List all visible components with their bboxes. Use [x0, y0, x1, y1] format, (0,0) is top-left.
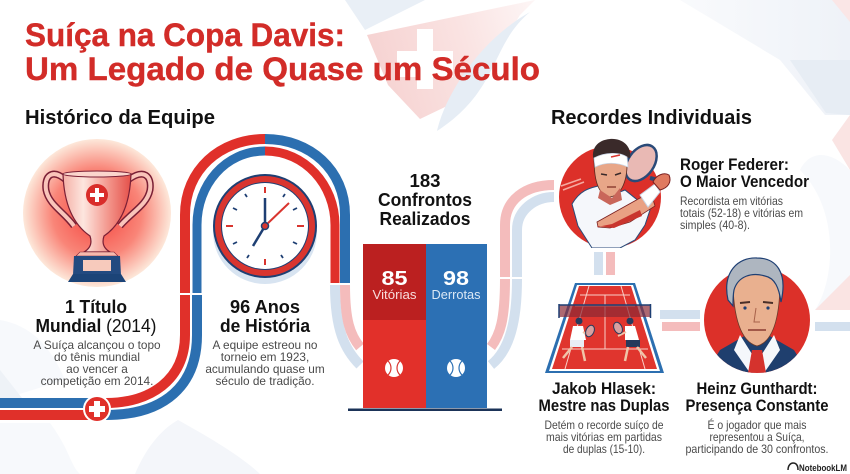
- text: world title: ao vencer a: [66, 362, 128, 376]
- bar chart: wins and losses: [348, 244, 502, 411]
- text: jakob hlasek: Detém o recorde suíço de: [544, 418, 664, 432]
- portrait: heinz gunthardt: [704, 258, 810, 373]
- text: world title: [33, 296, 161, 388]
- text: years of history: 96 Anos: [230, 296, 300, 317]
- text: roger federer: totais (52-18) e vitórias em: [680, 206, 803, 220]
- text: jakob hlasek: Jakob Hlasek:: [552, 380, 656, 398]
- icon: trophy: [23, 139, 171, 287]
- text: world title: 1 Título: [65, 296, 127, 317]
- text: years of history: de História: [220, 315, 311, 336]
- text: years of history: A equipe estreou no: [213, 338, 318, 352]
- connector: federer to court: [594, 252, 615, 275]
- text: heinz gunthardt: Presença Constante: [686, 397, 828, 415]
- text: heinz gunthardt: É o jogador que mais: [708, 418, 807, 432]
- text: world title: competição em 2014.: [41, 374, 153, 388]
- illustration: doubles court: [545, 283, 664, 373]
- wins label: [372, 268, 416, 302]
- text: years of history: torneio em 1923,: [221, 350, 309, 364]
- text: jakob hlasek: Mestre nas Duplas: [538, 397, 670, 415]
- text: total ties: [378, 170, 472, 229]
- text: roger federer: [680, 156, 810, 232]
- text: world title: Mundial (2014): [36, 315, 156, 336]
- icon: ball on losses: [447, 359, 465, 377]
- text: heinz gunthardt: participando de 30 confrontos.: [686, 442, 828, 456]
- heading: individual records: Recordes Individuais: [551, 106, 752, 129]
- icon: ball on wins: [385, 359, 403, 377]
- heading: team history: Histórico da Equipe: [25, 106, 215, 129]
- connector: court to heinz: [660, 310, 850, 331]
- icon: swiss cross junction: [83, 395, 111, 423]
- title: Um Legado de Quase um Século: [25, 51, 540, 87]
- title: [25, 17, 540, 87]
- losses label: Derrotas: [432, 288, 480, 302]
- text: years of history: [205, 296, 325, 388]
- left player: [563, 318, 596, 361]
- text: roger federer: simples (40-8).: [680, 218, 750, 232]
- text: jakob hlasek: [538, 380, 670, 456]
- text: jakob hlasek: mais vitórias em partidas: [546, 430, 662, 444]
- text: total ties: 183: [410, 170, 440, 191]
- right player: [612, 318, 646, 361]
- text: total ties: Realizados: [380, 208, 470, 229]
- ribbon timeline: [0, 139, 554, 415]
- icon: clock: [213, 174, 317, 284]
- text: roger federer: Roger Federer:: [680, 156, 789, 174]
- text: heinz gunthardt: Heinz Gunthardt:: [696, 380, 818, 398]
- text: years of history: século de tradição.: [215, 374, 315, 388]
- text: total ties: Confrontos: [378, 189, 472, 210]
- text: jakob hlasek: de duplas (15-10).: [563, 442, 645, 456]
- portrait: roger federer: [559, 139, 670, 248]
- text: roger federer: O Maior Vencedor: [680, 173, 810, 191]
- losses label: 98: [443, 268, 469, 290]
- wins label: Vitórias: [372, 288, 416, 302]
- text: roger federer: Recordista em vitórias: [680, 194, 783, 208]
- text: world title: do tênis mundial: [54, 350, 140, 364]
- text: years of history: acumulando quase um: [205, 362, 325, 376]
- wins label: 85: [382, 268, 408, 290]
- title: Suíça na Copa Davis:: [25, 17, 345, 53]
- text: heinz gunthardt: [686, 380, 828, 456]
- text: heinz gunthardt: representou a Suíça,: [710, 430, 804, 444]
- losses label: [432, 268, 480, 302]
- text: world title: A Suíça alcançou o topo: [33, 338, 161, 352]
